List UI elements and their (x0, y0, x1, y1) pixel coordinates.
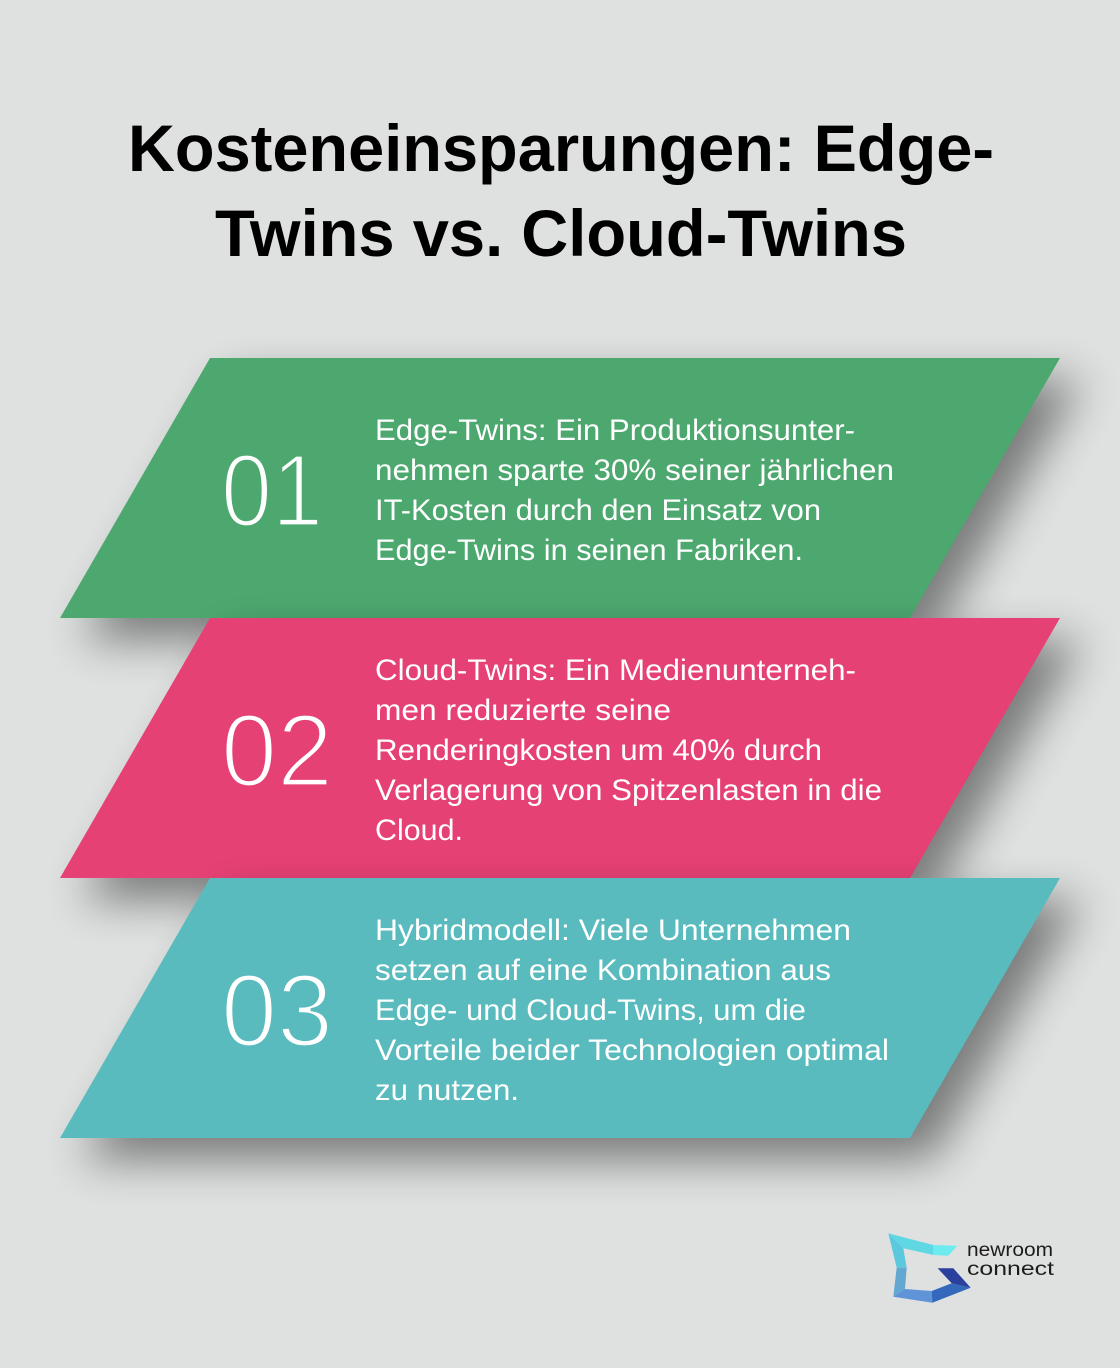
panel: 03 Hybridmodell (60, 878, 1082, 1160)
panel: 03 Hybridmodell: setzen auf eine Kombination aus (375, 954, 831, 987)
panel: 01 Edge-Twins (60, 358, 1082, 640)
panel: 02 Cloud-Twins: Verlagerung von Spitzenlasten in die (375, 774, 882, 807)
logo: newroom connect (888, 1233, 1055, 1303)
panel: 01 Edge-Twins: 01 (221, 433, 323, 548)
panel: 01 Edge-Twins: IT-Kosten durch den Einsatz von (375, 494, 821, 527)
panel: 01 Edge-Twins: Edge-Twins in seinen Fabriken. (375, 534, 803, 567)
panel: 02 Cloud-Twins (60, 618, 1082, 900)
panel: 01 Edge-Twins: Edge-Twins: Ein Produktionsunter- (375, 414, 855, 447)
panel: 03 Hybridmodell: Hybridmodell: Viele Unternehmen (375, 914, 851, 947)
panel: 01 Edge-Twins: nehmen sparte 30% seiner jährlichen (375, 454, 894, 487)
panel: 03 Hybridmodell: Edge- und Cloud-Twins, um die (375, 994, 806, 1027)
panel: 03 Hybridmodell: Vorteile beider Technologien optimal (375, 1034, 889, 1067)
panel: 03 Hybridmodell: zu nutzen. (375, 1074, 519, 1107)
panel: 02 Cloud-Twins: men reduzierte seine (375, 694, 671, 727)
panel: 02 Cloud-Twins: Cloud. (375, 814, 463, 847)
title (128, 111, 994, 270)
logo: newroom connect: connect (967, 1259, 1055, 1280)
panel: 02 Cloud-Twins: Cloud-Twins: Ein Medienunterneh- (375, 654, 856, 687)
panel: 03 Hybridmodell: 03 (221, 953, 333, 1068)
logo: newroom connect: newroom (967, 1240, 1053, 1261)
title: Twins vs. Cloud-Twins (215, 196, 907, 270)
title: Kosteneinsparungen: Edge- (128, 111, 994, 185)
panel: 02 Cloud-Twins: Renderingkosten um 40% durch (375, 734, 822, 767)
panel: 02 Cloud-Twins: 02 (221, 693, 333, 808)
